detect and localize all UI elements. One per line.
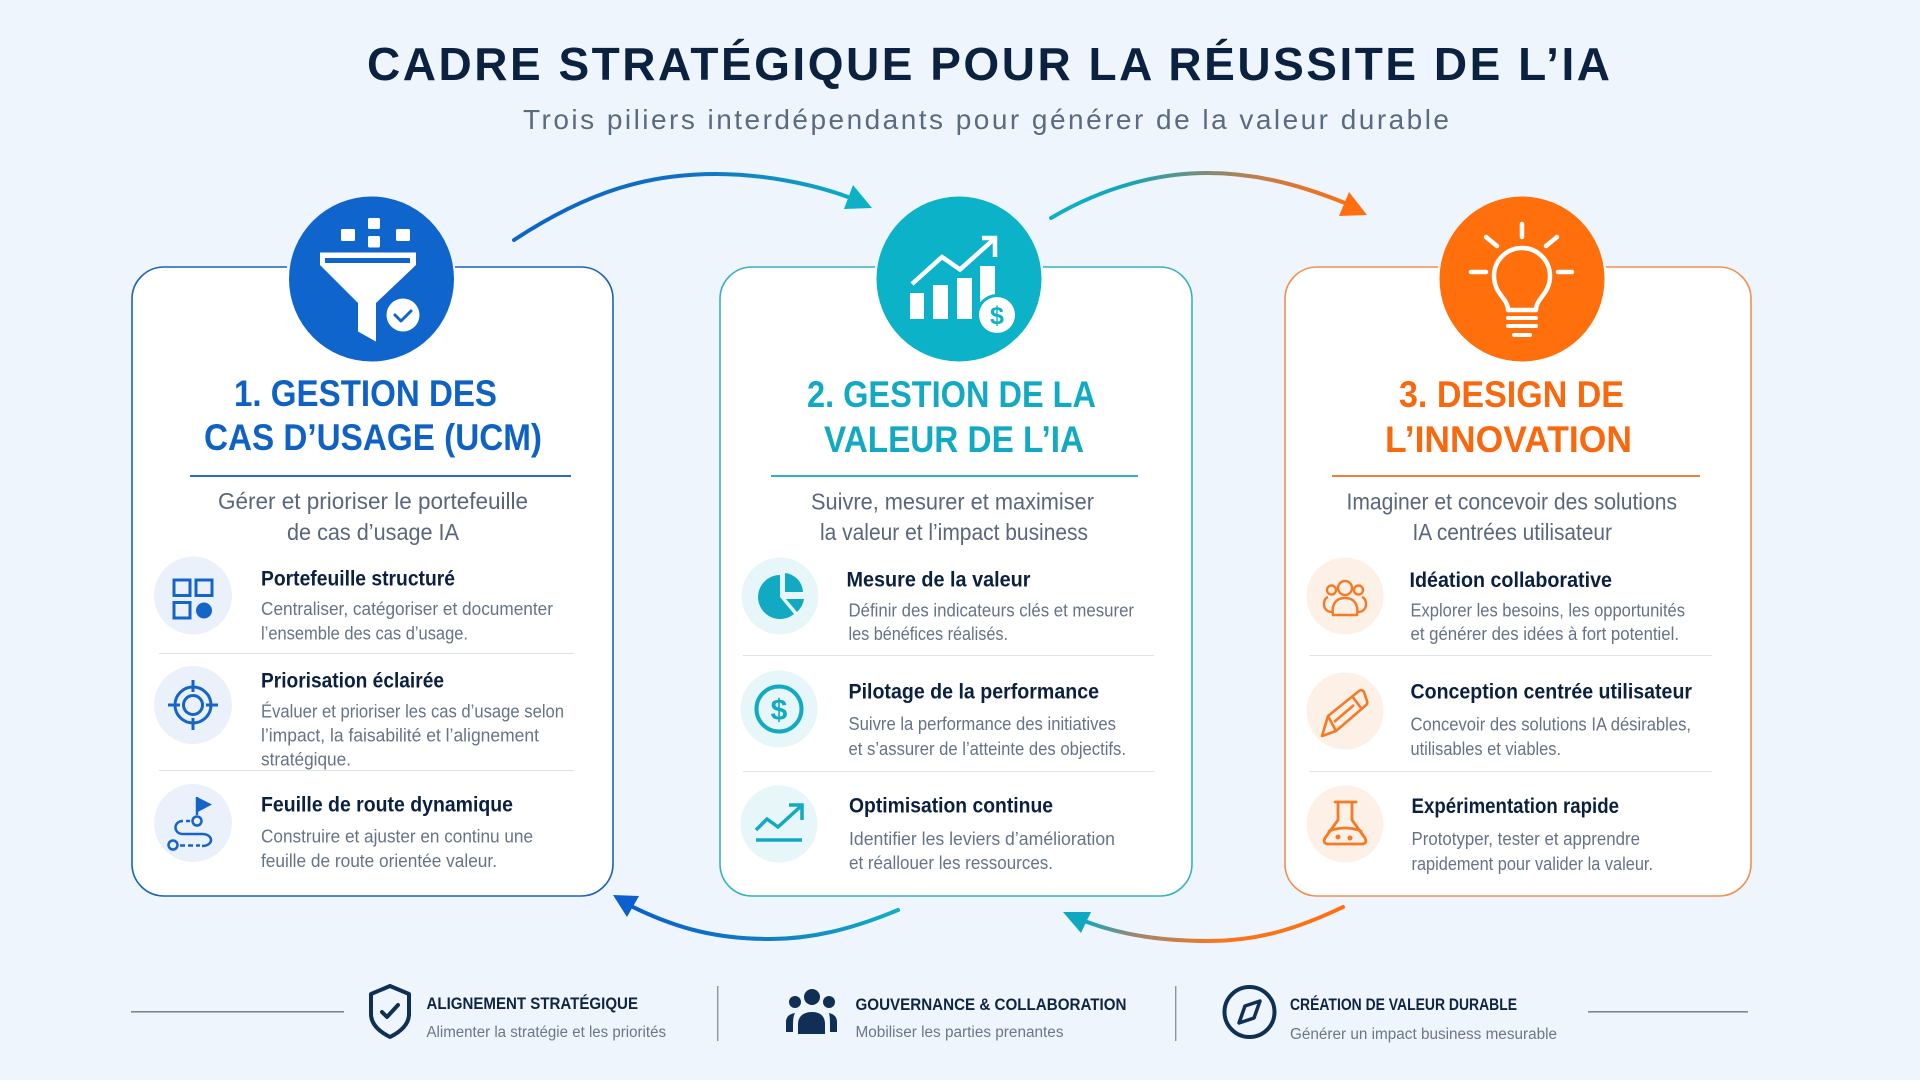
arrow: pillar 3 to pillar 2 bbox=[1063, 907, 1343, 941]
footer item: création de valeur durable bbox=[1224, 987, 1557, 1043]
heading bbox=[1385, 374, 1632, 460]
footer item: création de valeur durable: CRÉATION DE VALEUR DURABLE bbox=[1290, 995, 1517, 1014]
icon: people bbox=[786, 989, 837, 1034]
icon: pencil bbox=[1306, 672, 1384, 750]
item: mesure de la valeur bbox=[742, 558, 1134, 644]
item: idéation collaborative: Idéation collaborative bbox=[1410, 568, 1612, 592]
item: feuille de route dynamique: Feuille de route dynamique bbox=[261, 792, 513, 816]
panel: design de l'innovation bbox=[1285, 196, 1751, 896]
item: expérimentation rapide: Prototyper, tester et apprendre bbox=[1412, 829, 1640, 849]
heading bbox=[807, 374, 1096, 460]
item: pilotage de la performance: Pilotage de la performance bbox=[848, 680, 1099, 704]
footer item: gouvernance et collaboration: Mobiliser les parties prenantes bbox=[856, 1024, 1064, 1041]
heading: 2. GESTION DE LA bbox=[807, 374, 1096, 415]
item: pilotage de la performance: Suivre la performance des initiatives bbox=[848, 714, 1116, 734]
subtitle: Trois piliers interdépendants pour générer de la valeur durable bbox=[523, 104, 1449, 135]
footer item: gouvernance et collaboration bbox=[786, 989, 1126, 1041]
item: expérimentation rapide bbox=[1306, 786, 1653, 874]
item: priorisation éclairée: Évaluer et prioriser les cas d’usage selon bbox=[261, 702, 564, 722]
item: optimisation continue: Optimisation continue bbox=[849, 794, 1053, 818]
item: idéation collaborative bbox=[1306, 558, 1685, 644]
item: mesure de la valeur: les bénéfices réalisés. bbox=[848, 624, 1008, 644]
footer item: alignement stratégique: ALIGNEMENT STRATÉGIQUE bbox=[426, 994, 638, 1013]
icon: light bulb bbox=[1440, 196, 1604, 362]
item: idéation collaborative: Explorer les besoins, les opportunités bbox=[1410, 600, 1685, 620]
description: IA centrées utilisateur bbox=[1412, 519, 1612, 545]
item: optimisation continue: et réallouer les ressources. bbox=[849, 853, 1053, 873]
icon: dollar coin: $ bbox=[771, 694, 788, 727]
description bbox=[218, 488, 528, 545]
arrow: pillar 2 to pillar 3 bbox=[1051, 173, 1367, 218]
arrow: pillar 2 to pillar 1 bbox=[613, 895, 898, 939]
icon: growth chart: $ bbox=[990, 302, 1004, 330]
item: expérimentation rapide: rapidement pour valider la valeur. bbox=[1412, 854, 1653, 874]
icon: growth chart bbox=[876, 196, 1042, 362]
icon: funnel bbox=[289, 196, 454, 362]
item: optimisation continue: Identifier les leviers d’amélioration bbox=[849, 829, 1115, 849]
icon: pie chart bbox=[742, 558, 818, 634]
item: pilotage de la performance bbox=[740, 670, 1126, 759]
footer item: création de valeur durable: Générer un impact business mesurable bbox=[1290, 1026, 1557, 1043]
icon: trend line bbox=[740, 786, 818, 862]
panel: gestion des cas d'usage bbox=[132, 196, 613, 896]
description: de cas d’usage IA bbox=[287, 519, 460, 545]
heading: L’INNOVATION bbox=[1385, 419, 1632, 460]
heading bbox=[204, 373, 542, 458]
item: idéation collaborative: et générer des idées à fort potentiel. bbox=[1410, 624, 1679, 644]
item: conception centrée utilisateur: Concevoir des solutions IA désirables, bbox=[1410, 714, 1691, 734]
item: priorisation éclairée bbox=[154, 666, 564, 770]
icon: flask bbox=[1306, 786, 1384, 862]
footer item: alignement stratégique bbox=[371, 986, 666, 1041]
item: expérimentation rapide: Expérimentation rapide bbox=[1412, 794, 1619, 818]
item: pilotage de la performance: et s’assurer de l’atteinte des objectifs. bbox=[848, 739, 1126, 759]
item: portefeuille structuré: Centraliser, catégoriser et documenter bbox=[261, 599, 553, 619]
description bbox=[1346, 488, 1677, 545]
icon: route bbox=[154, 784, 232, 862]
item: mesure de la valeur: Définir des indicateurs clés et mesurer bbox=[848, 600, 1134, 620]
item: conception centrée utilisateur bbox=[1306, 672, 1693, 759]
panel: gestion de la valeur bbox=[720, 196, 1192, 896]
item: optimisation continue bbox=[740, 786, 1115, 873]
item: portefeuille structuré bbox=[154, 556, 553, 644]
item: priorisation éclairée: stratégique. bbox=[261, 750, 351, 770]
item: conception centrée utilisateur: utilisables et viables. bbox=[1410, 739, 1561, 759]
heading: CAS D’USAGE (UCM) bbox=[204, 417, 542, 458]
item: portefeuille structuré: Portefeuille structuré bbox=[261, 566, 455, 590]
footer item: alignement stratégique: Alimenter la stratégie et les priorités bbox=[426, 1024, 666, 1041]
icon: team bbox=[1306, 558, 1384, 634]
description: la valeur et l’impact business bbox=[820, 519, 1088, 545]
arrow: pillar 1 to pillar 2 bbox=[514, 174, 872, 240]
icon: target bbox=[154, 666, 232, 744]
icon: dollar coin bbox=[740, 670, 818, 748]
description: Suivre, mesurer et maximiser bbox=[811, 488, 1094, 514]
description: Imaginer et concevoir des solutions bbox=[1346, 488, 1677, 514]
icon: compass bbox=[1224, 987, 1274, 1037]
item: feuille de route dynamique: Construire et ajuster en continu une bbox=[261, 826, 533, 846]
description: Gérer et prioriser le portefeuille bbox=[218, 488, 528, 514]
item: conception centrée utilisateur: Conception centrée utilisateur bbox=[1410, 680, 1693, 704]
icon: shield bbox=[371, 986, 409, 1037]
description bbox=[811, 488, 1094, 545]
item: mesure de la valeur: Mesure de la valeur bbox=[846, 568, 1031, 592]
item: priorisation éclairée: Priorisation éclairée bbox=[261, 668, 444, 692]
item: feuille de route dynamique: feuille de route orientée valeur. bbox=[261, 851, 497, 871]
heading: 3. DESIGN DE bbox=[1399, 374, 1624, 415]
title: CADRE STRATÉGIQUE POUR LA RÉUSSITE DE L’IA bbox=[367, 38, 1610, 90]
item: portefeuille structuré: l’ensemble des cas d’usage. bbox=[261, 624, 468, 644]
item: feuille de route dynamique bbox=[154, 784, 533, 871]
heading: VALEUR DE L’IA bbox=[824, 419, 1084, 460]
heading: 1. GESTION DES bbox=[234, 373, 497, 414]
item: priorisation éclairée: l’impact, la faisabilité et l’alignement bbox=[261, 726, 539, 746]
icon: grid bbox=[154, 556, 232, 634]
footer item: gouvernance et collaboration: GOUVERNANCE & COLLABORATION bbox=[856, 996, 1126, 1014]
